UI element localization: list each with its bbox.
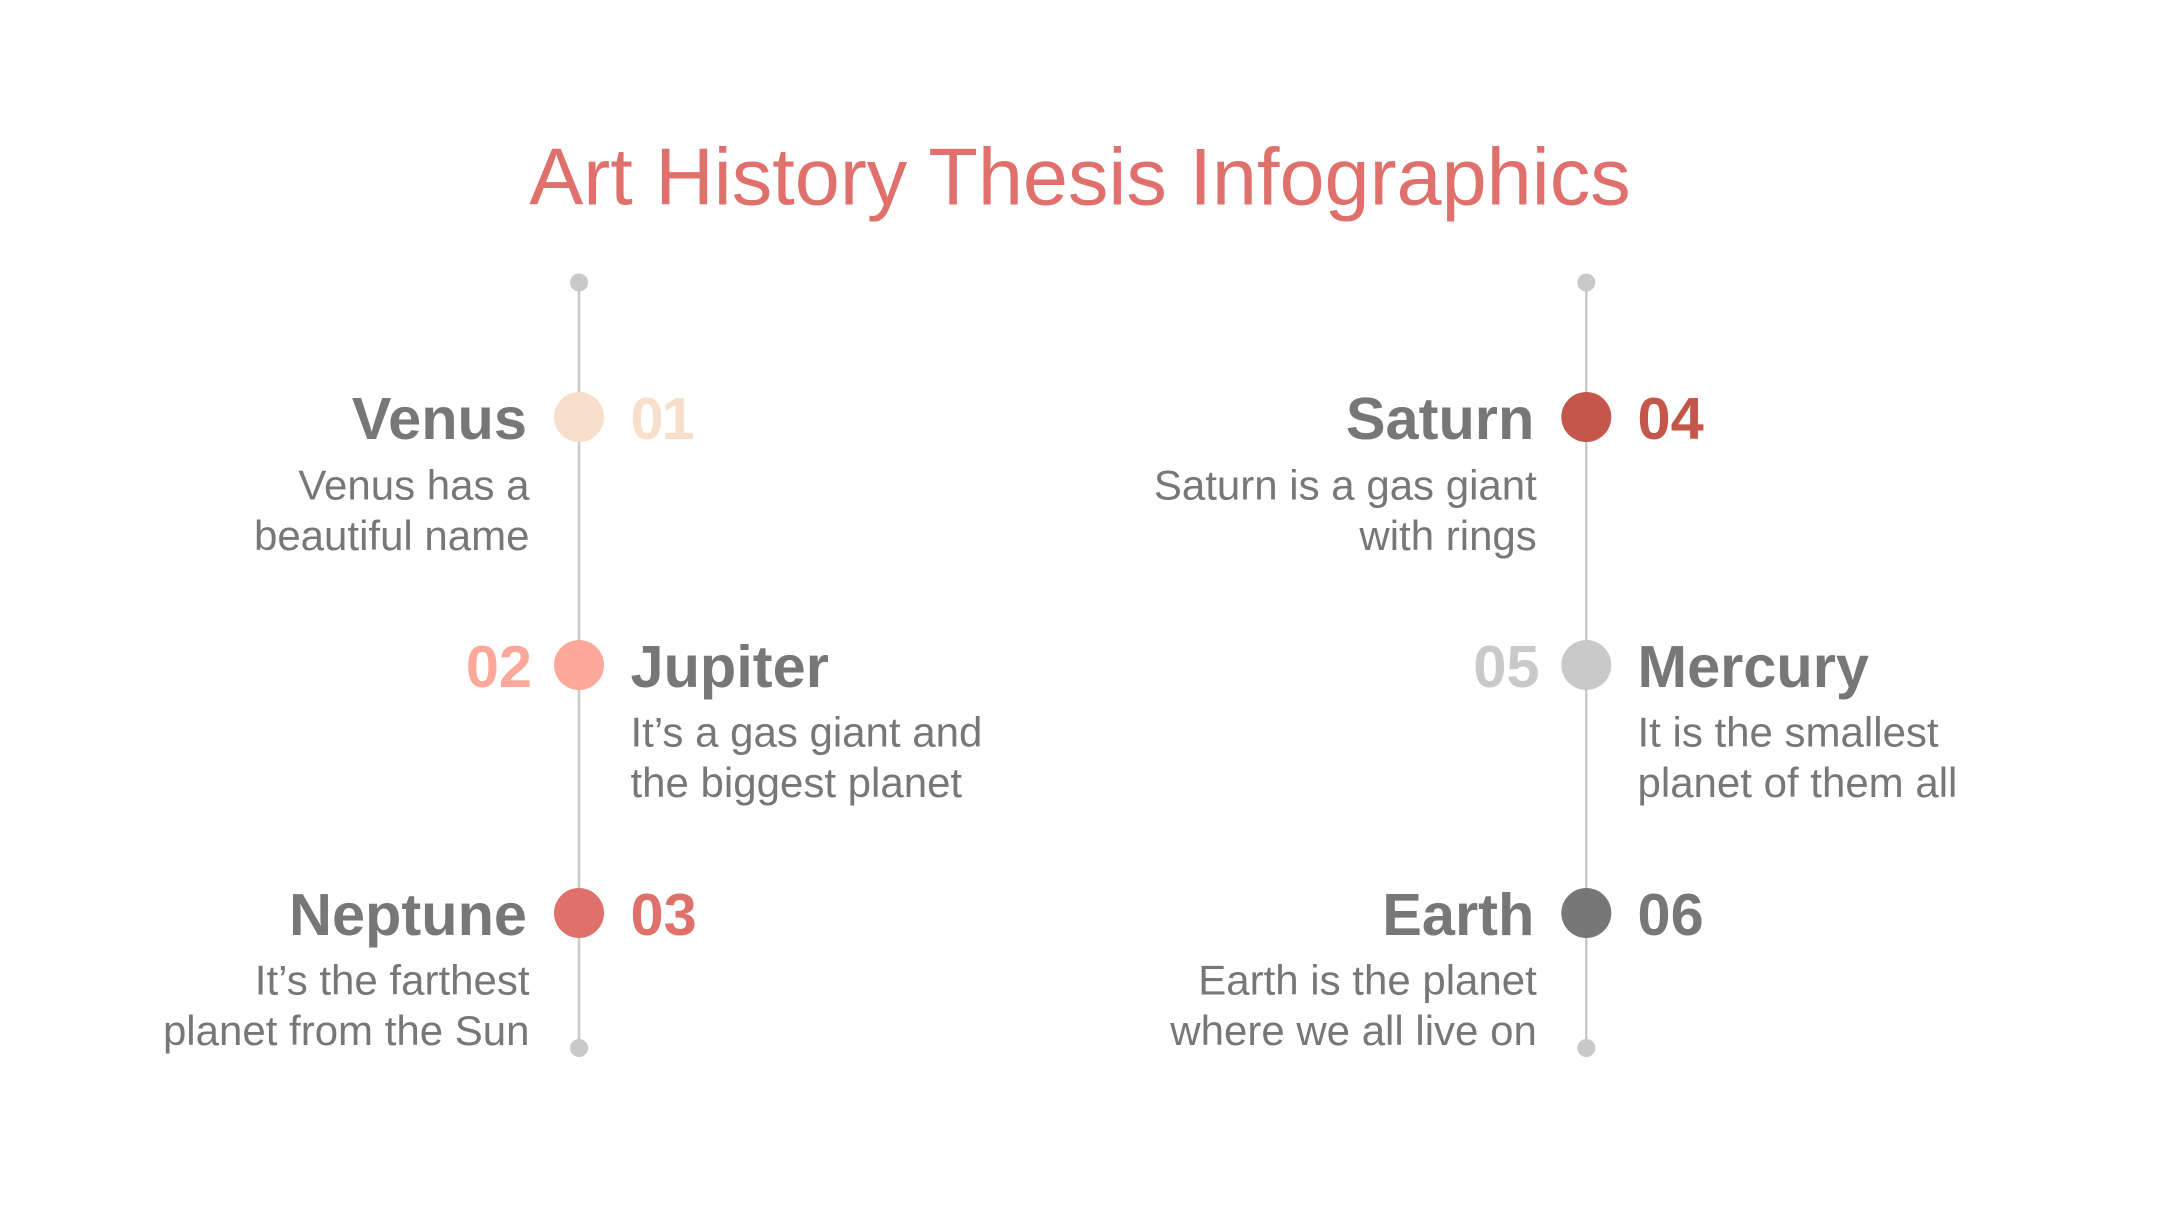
description Mercury: planet of them all bbox=[1638, 759, 1957, 806]
heading Neptune: Neptune bbox=[289, 881, 527, 948]
marker 01 bbox=[554, 392, 604, 442]
description Venus: beautiful name bbox=[254, 512, 530, 559]
description Earth: where we all live on bbox=[1169, 1007, 1537, 1054]
heading Venus: Venus bbox=[352, 385, 527, 452]
title: Art History Thesis Infographics bbox=[529, 132, 1631, 222]
number 06: 06 bbox=[1638, 881, 1704, 948]
marker 04 bbox=[1561, 392, 1611, 442]
description Saturn: Saturn is a gas giant bbox=[1154, 462, 1537, 508]
number 05: 05 bbox=[1473, 633, 1540, 700]
description Mercury: It is the smallest bbox=[1638, 708, 1939, 756]
heading Mercury: Mercury bbox=[1638, 633, 1869, 700]
item 02: Jupiter bbox=[466, 633, 982, 806]
item 05: Mercury bbox=[1473, 633, 1957, 806]
description Neptune: It’s the farthest bbox=[255, 956, 530, 1004]
description Jupiter: It’s a gas giant and bbox=[630, 708, 982, 756]
item 01: Venus bbox=[254, 385, 694, 559]
heading Saturn: Saturn bbox=[1346, 385, 1534, 452]
item 06: Earth bbox=[1169, 881, 1704, 1054]
marker 03 bbox=[554, 888, 604, 938]
marker 02 bbox=[554, 640, 604, 690]
number 03: 03 bbox=[630, 881, 697, 948]
description Neptune: planet from the Sun bbox=[163, 1007, 530, 1054]
heading Earth: Earth bbox=[1382, 881, 1534, 948]
heading Jupiter: Jupiter bbox=[630, 633, 829, 700]
number 01: 01 bbox=[630, 385, 694, 452]
marker 06 bbox=[1561, 888, 1611, 938]
description Earth: Earth is the planet bbox=[1198, 956, 1537, 1004]
description Venus: Venus has a bbox=[298, 462, 530, 508]
item 03: Neptune bbox=[163, 881, 697, 1054]
left timeline bbox=[570, 274, 588, 1057]
description Jupiter: the biggest planet bbox=[630, 759, 962, 806]
number 04: 04 bbox=[1638, 385, 1704, 452]
right timeline bbox=[1577, 274, 1595, 1057]
item 04: Saturn bbox=[1154, 385, 1704, 559]
marker 05 bbox=[1561, 640, 1611, 690]
description Saturn: with rings bbox=[1358, 512, 1537, 559]
number 02: 02 bbox=[466, 633, 532, 700]
